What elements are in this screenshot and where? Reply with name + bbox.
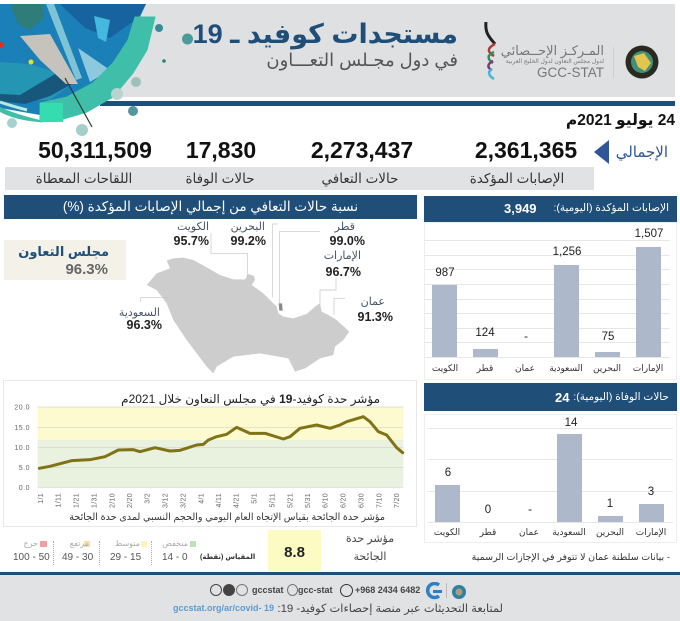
bar chart: daily confirmed cases: الإمارات <box>633 363 663 373</box>
map label: Bahrain: 99.2% <box>231 234 266 248</box>
line chart plot: 2/20 <box>127 493 134 508</box>
stat: deaths: 17,830 <box>186 137 256 163</box>
scale: critical <box>13 539 50 563</box>
line chart plot: 5/31 <box>305 493 312 508</box>
line chart plot: 1/21 <box>74 493 81 508</box>
map label: Qatar <box>330 221 365 248</box>
panel: severity index line chart <box>3 380 417 527</box>
line chart plot: 6/20 <box>341 493 348 508</box>
bar chart: daily deaths: البحرين <box>596 527 624 537</box>
bar chart: daily confirmed cases: السعودية <box>549 363 583 373</box>
map label: Oman: عمان <box>361 296 385 308</box>
footer social handles: gccstat <box>252 585 284 595</box>
line chart plot: 20.0 <box>14 405 30 412</box>
line chart plot: 5.0 <box>19 465 30 472</box>
line chart plot: 3/12 <box>163 493 170 508</box>
map label: Oman <box>358 296 393 324</box>
bar chart: daily deaths: الكويت <box>434 527 460 537</box>
scale: low: 14 - 0 <box>162 552 188 563</box>
bar chart: daily deaths: 3 <box>648 486 654 498</box>
severity index value <box>268 530 321 571</box>
label: recoveries: حالات التعافي <box>322 171 398 186</box>
footer rule <box>0 572 680 575</box>
line chart plot: 1/31 <box>91 493 98 508</box>
scale label: المقياس (نقطة) <box>200 554 255 561</box>
bar chart: daily confirmed cases: عمان <box>515 363 535 373</box>
bar chart: daily confirmed cases: الكويت <box>432 363 458 373</box>
bar chart: daily deaths: السعودية <box>552 527 586 537</box>
line chart plot: 7/20 <box>394 493 401 508</box>
note on Oman data: - بيانات سلطنة عمان لا تتوفر في الإجازات الرسمية <box>472 552 670 563</box>
footer band <box>0 575 680 621</box>
line chart plot: 6/30 <box>358 493 365 508</box>
line chart plot: 1/11 <box>56 493 63 507</box>
bar chart: daily confirmed cases: 1,507 <box>635 228 663 240</box>
label: vaccines: اللقاحات المعطاة <box>36 171 132 186</box>
logo: GCC-STAT swoosh <box>484 22 496 80</box>
GCC callout: مجلس التعاون <box>18 244 109 259</box>
bar chart: daily deaths <box>424 414 677 543</box>
panel heading: recovery rate <box>4 195 417 219</box>
bar chart: daily confirmed cases: 75 <box>602 331 614 343</box>
map label: Bahrain: البحرين <box>231 221 265 233</box>
footer logos <box>426 582 466 600</box>
line chart plot: 3/2 <box>145 493 152 504</box>
severity index label <box>346 533 394 563</box>
scale: moderate: 29 - 15 <box>110 552 141 563</box>
bar chart: daily deaths: عمان <box>519 527 539 537</box>
bar chart: daily deaths: - <box>528 504 532 516</box>
line chart plot: 0.0 <box>19 485 30 492</box>
scale: moderate <box>110 539 147 563</box>
map label: UAE: 96.7% <box>326 265 361 279</box>
map of GCC <box>140 224 350 374</box>
line chart plot: 5/1 <box>252 493 259 504</box>
GCC callout: 96.3% <box>65 261 108 278</box>
line chart plot: 3/22 <box>180 493 187 508</box>
line chart plot <box>14 404 404 508</box>
bar chart: daily confirmed cases <box>424 222 677 380</box>
panel heading: daily cases <box>424 196 677 222</box>
stat: confirmed cases: 2,361,365 <box>475 137 577 163</box>
line chart plot: 1/1 <box>38 493 45 504</box>
scale: low: منخفض <box>162 539 188 548</box>
stat label band <box>5 167 594 190</box>
date: 24 يوليو 2021م <box>566 112 675 129</box>
line chart plot: 6/10 <box>323 493 330 508</box>
scale: critical: 100 - 50 <box>13 552 50 563</box>
footer social handles: +968 2434 6482 <box>355 585 420 595</box>
droplet near title <box>182 34 193 44</box>
line chart plot: 5/11 <box>269 493 276 507</box>
logo divider <box>613 47 614 78</box>
map label: Oman: 91.3% <box>358 310 393 324</box>
bar chart: daily deaths: قطر <box>480 527 496 537</box>
panel heading: daily cases: الإصابات المؤكدة (اليومية): <box>553 202 669 214</box>
stat: recoveries: 2,273,437 <box>311 137 413 163</box>
map label: Kuwait <box>174 221 209 248</box>
line chart plot: 10.0 <box>14 445 30 452</box>
scale: moderate: متوسط <box>115 539 140 548</box>
total label and arrow <box>594 140 668 164</box>
severity index label: مؤشر حدة <box>346 533 394 545</box>
subtitle: في دول مجـلس التعـــاون <box>266 50 458 70</box>
bar chart: daily confirmed cases: البحرين <box>593 363 621 373</box>
bar chart: daily deaths: الإمارات <box>636 527 666 537</box>
chart title: مؤشر حدة كوفيد-19 في مجلس النعاون خلال 2021م <box>121 392 380 406</box>
bar chart: daily deaths: 1 <box>607 498 613 510</box>
line chart plot: 5/21 <box>287 493 294 508</box>
footer social handles <box>210 584 420 597</box>
map label: Saudi Arabia: السعودية <box>119 307 160 319</box>
label: deaths: حالات الوفاة <box>185 171 255 186</box>
bar chart: daily confirmed cases: 124 <box>475 327 495 339</box>
logo: GCC-STAT text: لدول مجلس التعاون لدول الخليج العربية <box>506 59 604 65</box>
line chart plot: 2/10 <box>109 493 116 508</box>
footer social handles: gcc-stat <box>298 585 333 595</box>
GCC callout <box>4 240 126 280</box>
stat: vaccines: 50,311,509 <box>38 137 152 163</box>
map label: Saudi Arabia: 96.3% <box>127 318 162 332</box>
logo: GCC-STAT text: GCC-STAT <box>537 65 604 80</box>
scale: high <box>62 539 93 563</box>
title: مستجدات كوفيد ـ 19 <box>193 19 458 49</box>
scale: critical: حرج <box>23 539 38 548</box>
line chart plot: 4/1 <box>198 493 205 504</box>
logo: GCC emblem <box>626 46 658 78</box>
panel heading: daily deaths: حالات الوفاة (اليومية): <box>573 391 669 403</box>
map label: Kuwait: الكويت <box>177 221 209 233</box>
bar chart: daily deaths: 14 <box>565 417 577 429</box>
logo: GCC-STAT text: المـركـز الإحــصائي <box>501 43 604 58</box>
chart caption: مؤشر حدة الجائحة بقياس الإتجاه العام اليومي والحجم النسبي لمدى حدة الجائحة <box>69 512 385 523</box>
footer link: gccstat.org/ar/covid- 19 <box>173 603 274 613</box>
line chart plot: 4/11 <box>216 493 223 507</box>
map label: Qatar: قطر <box>335 221 355 233</box>
map label: Saudi Arabia <box>119 307 162 332</box>
bar chart: daily deaths: 6 <box>445 467 451 479</box>
header illustration: globe with teal ring and droplets <box>0 4 166 136</box>
severity index label: الجائحة <box>354 551 386 563</box>
line chart plot: 7/10 <box>376 493 383 508</box>
scale: high: 49 - 30 <box>62 552 93 563</box>
bar chart: daily confirmed cases: - <box>524 331 528 343</box>
logo: GCC-STAT text <box>501 43 604 80</box>
map label: Kuwait: 95.7% <box>174 234 209 248</box>
panel heading: recovery rate: نسبة حالات التعافي من إجمالي الإصابات المؤكدة (%) <box>63 199 358 214</box>
scale: high: مرتفع <box>70 539 89 548</box>
line chart plot: 4/21 <box>234 493 241 508</box>
footer call to action: لمتابعة التحديثات عبر منصة إحصاءات كوفيد- 19: <box>277 603 503 615</box>
map label: UAE <box>324 250 361 279</box>
bar chart: daily confirmed cases: 987 <box>435 267 455 279</box>
header rule <box>100 101 675 106</box>
total label and arrow: الإجمالي <box>616 144 668 161</box>
map label: Qatar: 99.0% <box>330 234 365 248</box>
label: confirmed: الإصابات المؤكدة <box>470 171 564 186</box>
bar chart: daily confirmed cases: قطر <box>477 363 493 373</box>
panel heading: daily deaths <box>424 383 677 411</box>
bar chart: daily confirmed cases: 1,256 <box>553 246 581 258</box>
bar chart: daily deaths: 0 <box>485 504 491 516</box>
map label: UAE: الإمارات <box>324 250 361 262</box>
panel heading: daily deaths: 24 <box>555 390 569 405</box>
panel heading: daily cases: 3,949 <box>504 201 537 216</box>
scale: low <box>162 539 196 563</box>
header band <box>0 4 675 97</box>
severity index value: 8.8 <box>284 544 305 561</box>
line chart plot: 15.0 <box>14 425 30 432</box>
map label: Bahrain <box>230 221 266 248</box>
